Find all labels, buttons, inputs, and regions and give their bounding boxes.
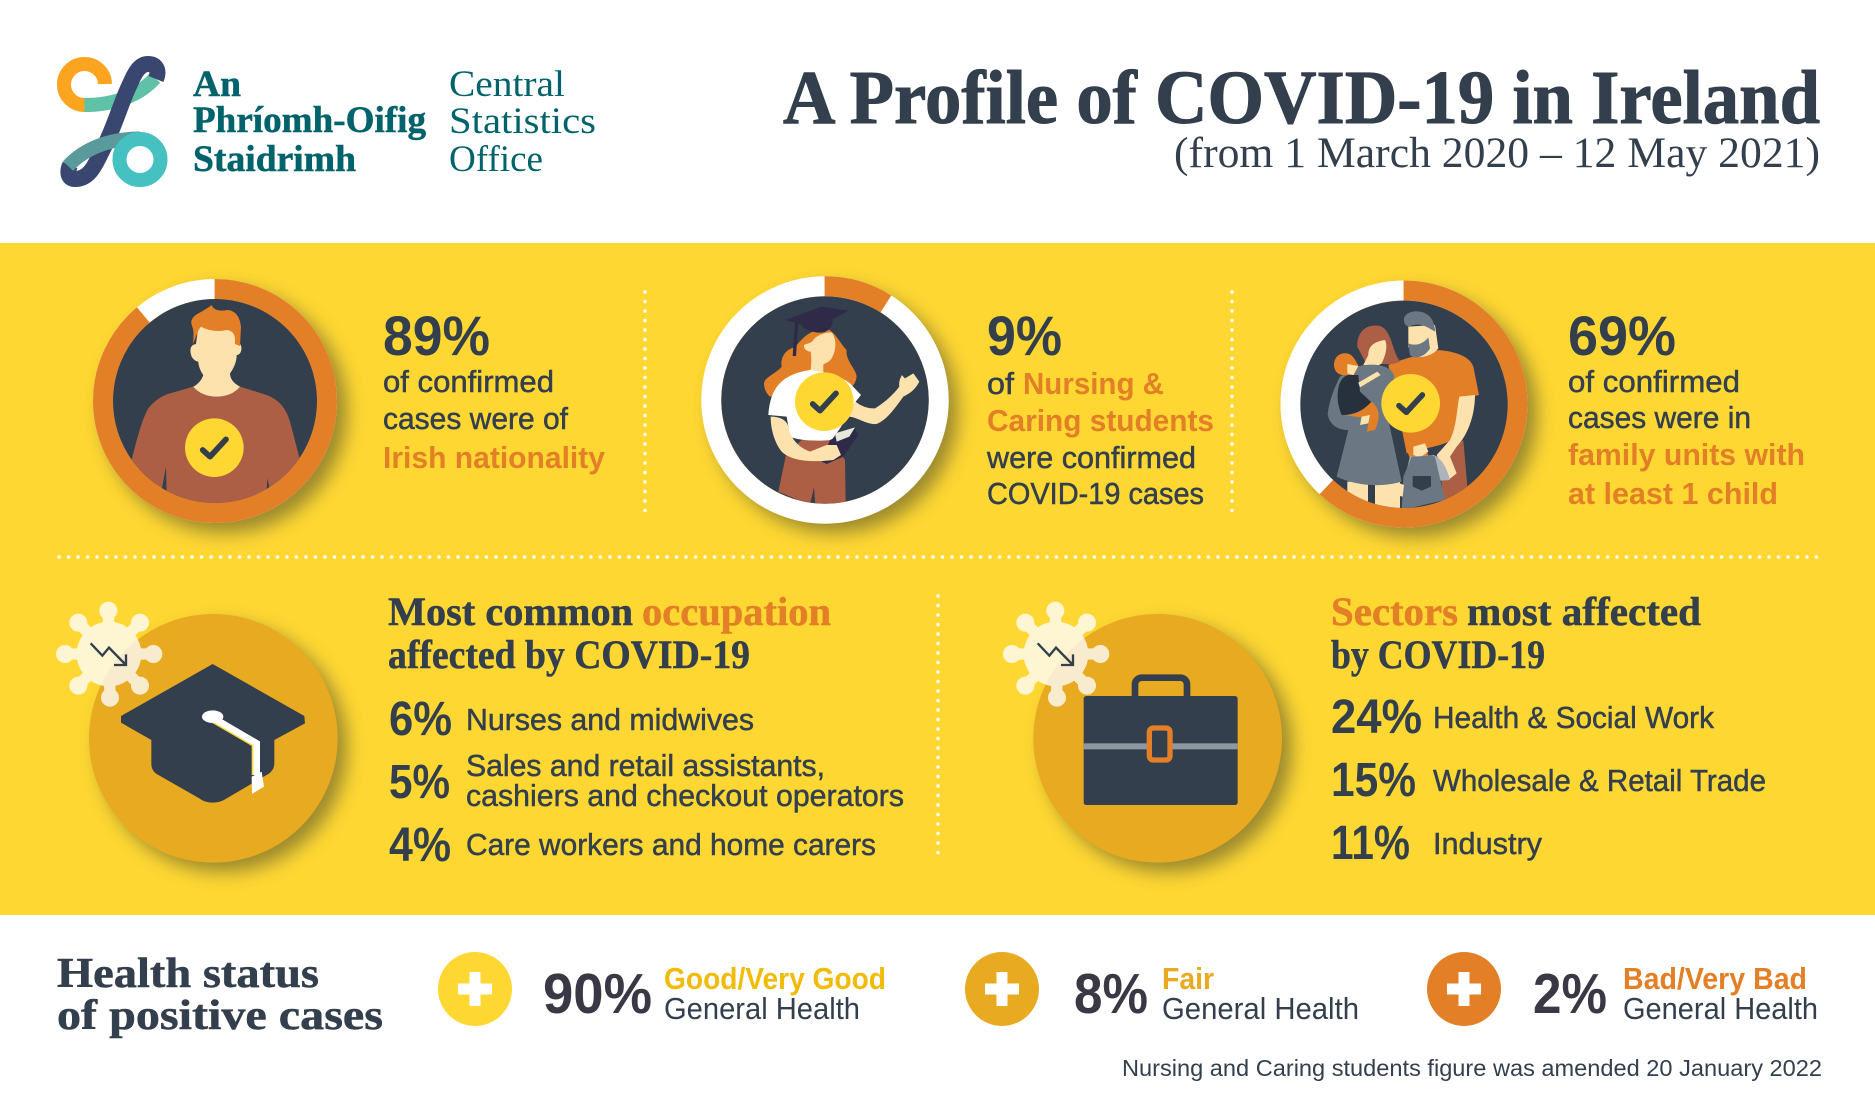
icon: family in ring bbox=[1290, 290, 1537, 537]
description bbox=[383, 364, 606, 475]
panel: occupations bbox=[56, 589, 904, 872]
item 11%: 11% bbox=[1331, 817, 1410, 870]
description: Nursing & bbox=[1023, 366, 1164, 401]
description bbox=[1568, 364, 1805, 511]
title: A Profile of COVID-19 in Ireland bbox=[783, 56, 1820, 140]
logo bbox=[64, 64, 596, 180]
description: cases were in bbox=[1568, 400, 1751, 435]
description: Caring students bbox=[987, 403, 1214, 438]
heading: Health status bbox=[57, 951, 319, 997]
bad health: General Health bbox=[1623, 991, 1818, 1026]
item 11% bbox=[1331, 817, 1542, 870]
description: Irish nationality bbox=[383, 440, 606, 475]
description: were confirmed bbox=[986, 440, 1196, 475]
item 24%: 24% bbox=[1331, 691, 1422, 744]
stat 9%: 9% bbox=[987, 304, 1062, 367]
description: of confirmed bbox=[1568, 364, 1740, 399]
stat 69%: 69% bbox=[1568, 304, 1676, 367]
icon: plus amber bbox=[965, 952, 1039, 1026]
logo Irish name: An bbox=[193, 64, 241, 105]
fair health bbox=[1074, 961, 1359, 1026]
icon: plus yellow bbox=[438, 952, 512, 1026]
panel: family units bbox=[1290, 290, 1805, 537]
bad health: 2% bbox=[1533, 962, 1607, 1026]
icon: student in ring bbox=[711, 286, 958, 533]
description: of confirmed bbox=[383, 364, 554, 399]
panel: Irish nationality bbox=[103, 289, 606, 533]
stat 89%: 89% bbox=[383, 304, 490, 367]
logo English name: Central bbox=[449, 64, 565, 105]
footnote: Nursing and Caring students figure was amended 20 January 2022 bbox=[1122, 1055, 1822, 1081]
item 4%: Care workers and home carers bbox=[466, 827, 876, 862]
heading: Most common bbox=[388, 589, 633, 634]
item 4%: 4% bbox=[389, 819, 451, 872]
yellow panel background bbox=[0, 243, 1875, 915]
bad health bbox=[1533, 961, 1818, 1026]
item 5%: cashiers and checkout operators bbox=[466, 778, 904, 813]
logo English name: Statistics bbox=[449, 101, 596, 142]
logo English name: Office bbox=[449, 139, 543, 180]
logo Irish name bbox=[193, 64, 426, 180]
description: COVID-19 cases bbox=[987, 476, 1204, 511]
subtitle: (from 1 March 2020 – 12 May 2021) bbox=[1174, 130, 1820, 177]
good health: General Health bbox=[664, 991, 860, 1026]
logo English name bbox=[449, 64, 596, 180]
good health bbox=[543, 961, 886, 1026]
item 6%: Nurses and midwives bbox=[466, 702, 754, 737]
item 15%: Wholesale & Retail Trade bbox=[1433, 763, 1766, 798]
heading: of positive cases bbox=[57, 993, 383, 1039]
panel: sectors bbox=[1003, 589, 1766, 872]
logo mark bbox=[64, 64, 160, 180]
description: at least 1 child bbox=[1568, 476, 1778, 511]
heading bbox=[1331, 589, 1701, 677]
heading: most affected bbox=[1467, 589, 1701, 634]
item 11%: Industry bbox=[1433, 826, 1542, 861]
good health: Good/Very Good bbox=[664, 961, 886, 996]
heading: by COVID-19 bbox=[1331, 632, 1545, 677]
fair health: 8% bbox=[1074, 962, 1148, 1026]
item 6%: 6% bbox=[389, 693, 452, 746]
item 15% bbox=[1331, 754, 1766, 807]
icon: man in ring bbox=[103, 289, 347, 533]
logo Irish name: Staidrimh bbox=[193, 139, 356, 180]
heading: affected by COVID-19 bbox=[388, 632, 750, 677]
good health: 90% bbox=[543, 962, 652, 1026]
item 15%: 15% bbox=[1331, 754, 1416, 807]
heading: occupation bbox=[642, 589, 831, 634]
fair health: Fair bbox=[1162, 961, 1214, 996]
item 24%: Health & Social Work bbox=[1433, 700, 1714, 735]
heading: Sectors bbox=[1331, 589, 1458, 634]
item 24% bbox=[1331, 691, 1714, 744]
heading bbox=[388, 589, 831, 677]
icon: plus orange bbox=[1427, 952, 1501, 1026]
panel: Nursing and Caring students bbox=[711, 286, 1214, 533]
description: family units with bbox=[1568, 437, 1805, 472]
item 4% bbox=[389, 819, 876, 872]
item 5%: 5% bbox=[389, 756, 450, 809]
heading bbox=[57, 951, 383, 1039]
item 6% bbox=[389, 693, 754, 746]
bad health: Bad/Very Bad bbox=[1623, 961, 1807, 996]
description: cases were of bbox=[383, 401, 568, 436]
panel: health status bbox=[57, 951, 1818, 1039]
fair health: General Health bbox=[1162, 991, 1359, 1026]
icon: graduation cap with virus bbox=[56, 602, 347, 872]
item 5% bbox=[389, 748, 904, 813]
logo Irish name: Phríomh-Oifig bbox=[193, 100, 426, 141]
icon: briefcase with virus bbox=[1003, 602, 1292, 872]
description: of bbox=[987, 366, 1014, 401]
description bbox=[986, 366, 1214, 511]
item 5%: Sales and retail assistants, bbox=[466, 748, 825, 783]
